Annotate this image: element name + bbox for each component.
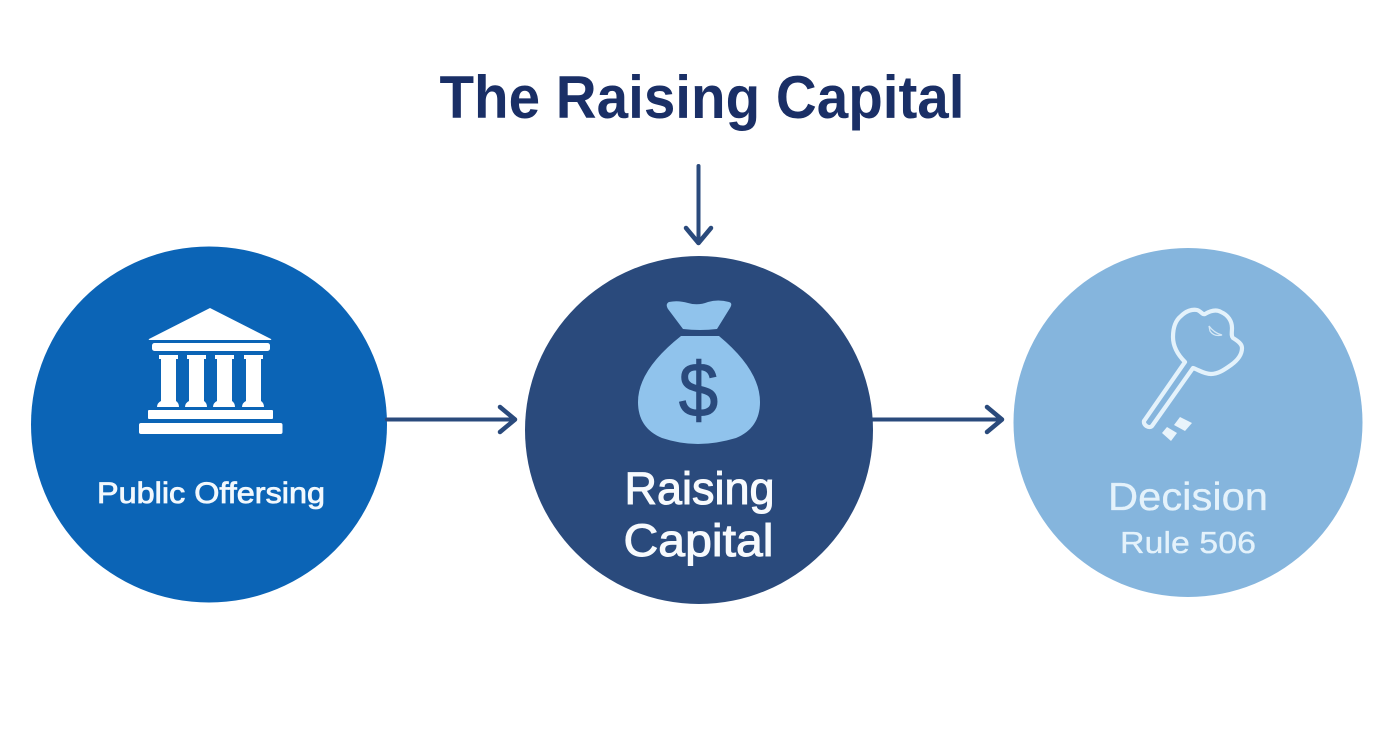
title: The Raising Capital	[440, 64, 964, 131]
key tooth upper	[1174, 417, 1192, 431]
bag body	[638, 336, 760, 444]
circle: Raising Capital	[525, 256, 873, 604]
circle: Decision	[1014, 248, 1362, 597]
dollar sign: $	[679, 347, 718, 433]
label: Public Offering: Public Offersing	[97, 477, 325, 510]
circle: Public Offering	[31, 246, 387, 602]
label: Decision: Decision	[1108, 476, 1268, 519]
key highlight	[1209, 326, 1222, 336]
key outline	[1144, 310, 1242, 427]
panel: Public Offering	[31, 246, 387, 602]
arrow: Public Offering to Raising Capital	[387, 407, 515, 432]
icon: bank building	[139, 308, 282, 434]
key tooth lower	[1162, 427, 1177, 441]
icon: key	[1144, 310, 1242, 441]
arrow: title down to Raising Capital	[686, 166, 711, 243]
panel: Decision Rule 506	[1014, 248, 1362, 597]
label: Raising Capital	[624, 463, 774, 566]
label: Rule 506: Rule 506	[1120, 525, 1256, 560]
label: Raising Capital: Capital	[624, 515, 774, 566]
label: Raising Capital: Raising	[624, 463, 774, 514]
icon: money bag	[638, 300, 760, 444]
panel: Raising Capital	[525, 256, 873, 604]
arrow: Raising Capital to Decision	[872, 407, 1002, 432]
bag neck	[667, 300, 731, 330]
